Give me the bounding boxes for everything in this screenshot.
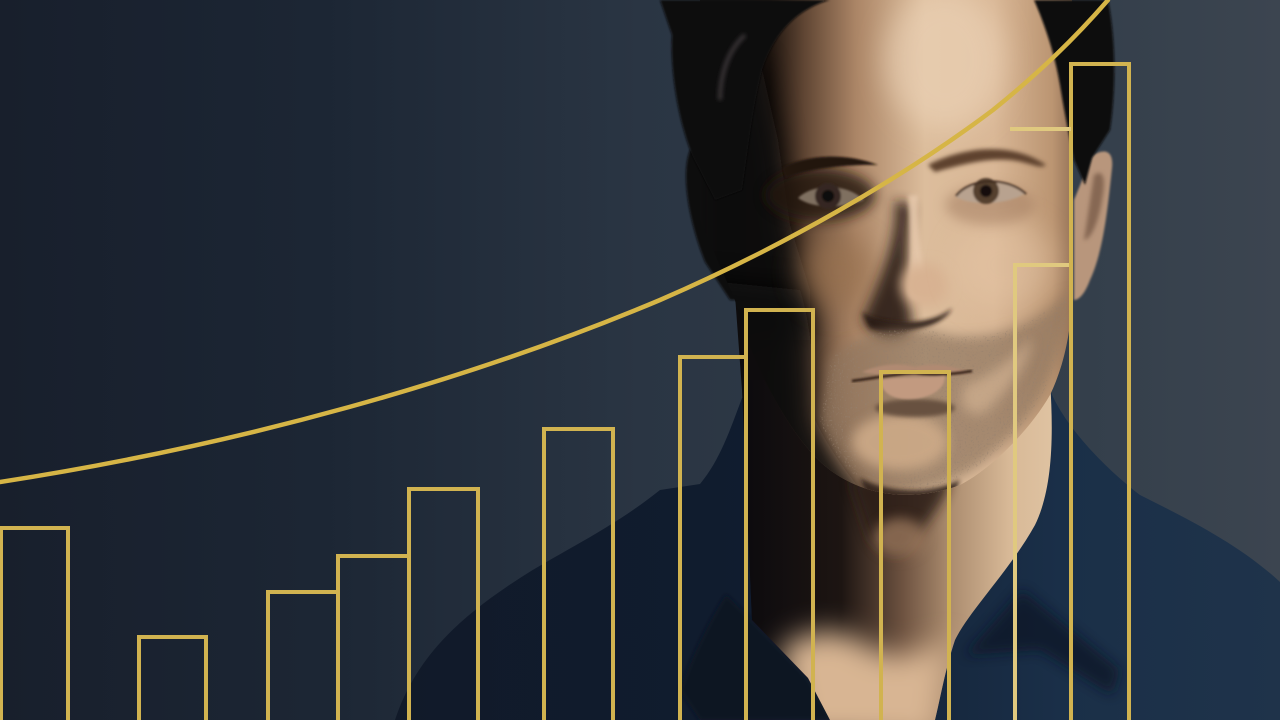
- bar 3: [268, 592, 338, 720]
- chin bottom shadow: [858, 476, 962, 495]
- hair: [660, 0, 1114, 200]
- right collar shadow: [965, 590, 1120, 695]
- bar ledge: [1010, 127, 1071, 131]
- bar 6: [544, 429, 613, 720]
- nose bridge highlight: [906, 194, 922, 298]
- face: [690, 0, 1090, 510]
- stubble speckle: [820, 305, 1066, 490]
- nose side shadow: [862, 200, 912, 339]
- hair left mass: [660, 0, 830, 200]
- nose tip: [901, 263, 949, 307]
- bar 5: [409, 489, 478, 720]
- throat midtone: [874, 518, 926, 558]
- stubble base: [820, 290, 1068, 495]
- eye socket left: [765, 169, 875, 221]
- bar 1: [1, 528, 68, 720]
- shaded side of jaw: [735, 295, 860, 640]
- lower lip: [880, 376, 945, 399]
- eye: right: [956, 178, 1026, 204]
- nose underside: [862, 308, 952, 331]
- cheek patch between stubble: [962, 338, 1031, 414]
- lip line: [852, 371, 972, 381]
- shirt: [395, 390, 1280, 720]
- right cheek light: [994, 226, 1062, 306]
- chin light: [852, 414, 948, 470]
- eye socket right: [945, 185, 1035, 225]
- neck and chest: [752, 393, 1052, 720]
- upper lip: [862, 365, 970, 376]
- bar 2: [139, 637, 206, 720]
- hair right mass: [1034, 0, 1114, 185]
- rising trend curve: [0, 0, 1108, 482]
- ear: left in shadow: [686, 150, 790, 300]
- bar 7: [680, 357, 746, 720]
- under-lip shadow: [875, 399, 955, 417]
- portrait of man: [395, 0, 1280, 720]
- hair highlight: [720, 35, 745, 100]
- lower left shadow: [756, 288, 874, 490]
- bar 9: [881, 372, 949, 720]
- forehead highlight: [885, 0, 1005, 130]
- bar 8: [746, 310, 813, 720]
- eyebrow: right: [928, 149, 1046, 172]
- bar 4: [338, 556, 408, 720]
- bar 11: [1071, 64, 1129, 720]
- eye: left: [798, 183, 864, 209]
- chin cast shadow: [850, 480, 950, 556]
- upper left shadow: [752, 68, 830, 346]
- left cheek: [800, 236, 876, 308]
- eyebrow: left: [782, 157, 878, 178]
- ear: right: [1074, 152, 1112, 300]
- mouth: [852, 365, 972, 399]
- bar 10: [1015, 265, 1071, 720]
- left collar: [680, 595, 832, 720]
- chest light: [780, 632, 950, 720]
